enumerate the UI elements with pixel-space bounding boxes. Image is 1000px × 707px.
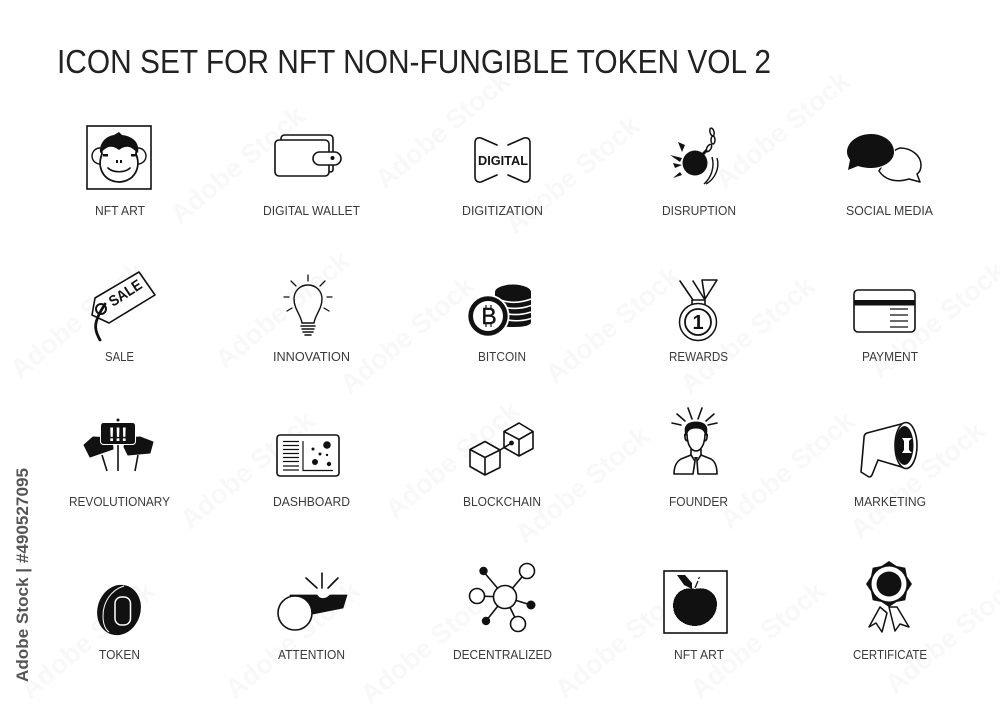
text: Adobe Stock	[675, 270, 821, 400]
icon: digitization: DIGITAL	[478, 153, 528, 168]
text: Adobe Stock	[355, 580, 501, 707]
text: Adobe Stock	[550, 575, 696, 705]
text: Adobe Stock	[685, 575, 831, 705]
text: Adobe Stock	[165, 100, 311, 230]
label: revolutionary: REVOLUTIONARY	[69, 495, 171, 509]
label: NFT art (apple): NFT ART	[674, 648, 724, 662]
text: Adobe Stock	[15, 575, 161, 705]
text: Adobe Stock	[335, 270, 481, 400]
text: Adobe Stock	[210, 245, 356, 375]
icon: revolutionary protest signs: !!!	[109, 425, 127, 446]
label: payment: PAYMENT	[862, 350, 918, 364]
icon: certificate rosette	[866, 561, 912, 632]
icon: payment card	[854, 290, 915, 332]
label: disruption: DISRUPTION	[662, 204, 736, 218]
icon: dashboard	[277, 435, 339, 476]
stock credit: Adobe Stock | #490527095	[13, 468, 32, 682]
icon: token coin	[91, 579, 147, 641]
text: Adobe Stock	[500, 110, 646, 240]
icon: decentralized network	[470, 564, 536, 632]
icon: apple NFT art	[664, 571, 727, 633]
icon: innovation bulb	[284, 275, 332, 335]
icon: sale tag: SALE	[106, 276, 145, 310]
label: digital wallet: DIGITAL WALLET	[263, 204, 360, 218]
title: ICON SET FOR NFT NON-FUNGIBLE TOKEN VOL 2	[57, 43, 771, 80]
icon: attention whistle	[278, 573, 347, 630]
label: founder: FOUNDER	[669, 495, 728, 509]
icon: disruption wrecking ball	[670, 128, 718, 184]
icon: digital wallet	[275, 135, 341, 176]
text: Adobe Stock	[710, 65, 856, 195]
text: Adobe Stock	[845, 415, 991, 545]
label: dashboard: DASHBOARD	[273, 495, 350, 509]
icon: monkey NFT art	[87, 126, 151, 189]
text: Adobe Stock	[540, 260, 686, 390]
icon: marketing megaphone	[861, 422, 917, 477]
icon: bitcoin coins	[466, 284, 531, 338]
icon: social media bubbles	[847, 134, 921, 182]
text: Adobe Stock	[715, 405, 861, 535]
icon: bitcoin coins: B	[481, 303, 497, 329]
icon: rewards medal	[680, 280, 717, 340]
label: digitization: DIGITIZATION	[462, 204, 543, 218]
label: rewards: REWARDS	[669, 350, 728, 364]
label: sale: SALE	[105, 350, 134, 364]
label: decentralized: DECENTRALIZED	[453, 648, 552, 662]
text: Adobe Stock	[370, 65, 516, 195]
label: attention: ATTENTION	[278, 648, 345, 662]
text: Adobe Stock	[175, 405, 321, 535]
text: Adobe Stock	[5, 255, 151, 385]
label: NFT art: NFT ART	[95, 204, 145, 218]
icon: founder	[672, 408, 717, 474]
icon: digitization	[475, 138, 530, 182]
icon: rewards medal: 1	[692, 312, 704, 334]
icon: blockchain cubes	[470, 423, 533, 475]
icon: sale tag	[92, 272, 155, 340]
label: marketing: MARKETING	[854, 495, 926, 509]
label: bitcoin: BITCOIN	[478, 350, 526, 364]
label: innovation: INNOVATION	[273, 350, 350, 364]
text: Adobe Stock	[510, 420, 656, 550]
text: Adobe Stock	[380, 395, 526, 525]
icon: revolutionary protest signs	[84, 418, 153, 471]
label: social media: SOCIAL MEDIA	[846, 204, 934, 218]
label: certificate: CERTIFICATE	[853, 648, 927, 662]
label: blockchain: BLOCKCHAIN	[463, 495, 541, 509]
text: Adobe Stock	[220, 575, 366, 705]
label: token: TOKEN	[99, 648, 140, 662]
